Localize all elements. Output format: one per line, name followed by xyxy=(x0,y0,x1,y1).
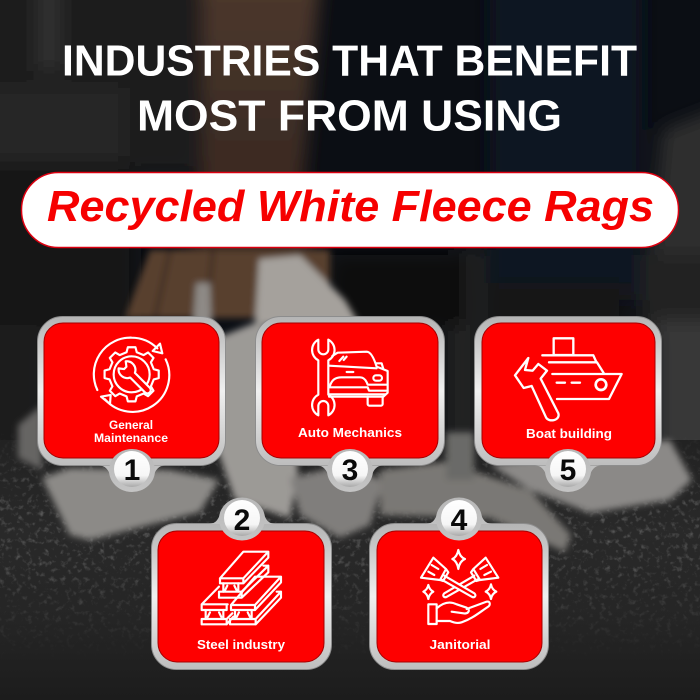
badge: number 3 xyxy=(327,449,373,492)
banner: product name pill: Recycled White Fleece Rags xyxy=(47,182,654,231)
badge: number 1: 1 xyxy=(124,454,140,487)
card 2: Steel industry xyxy=(152,498,332,670)
title xyxy=(62,36,637,140)
label: Maintenance xyxy=(94,433,168,445)
title: MOST FROM USING xyxy=(137,92,562,140)
badge: number 3: 3 xyxy=(342,454,358,487)
icon: stacked steel beams xyxy=(202,552,281,624)
card 4: Janitorial xyxy=(370,498,548,670)
label: General xyxy=(109,420,153,432)
icon: boat and wrench xyxy=(515,338,622,420)
badge: number 4: 4 xyxy=(451,504,468,537)
icon: gear and wrench with cycle arrows xyxy=(94,338,169,412)
badge: number 2 xyxy=(219,498,265,540)
label: Boat building xyxy=(526,427,612,441)
title: INDUSTRIES THAT BENEFIT xyxy=(62,36,637,86)
badge: number 5: 5 xyxy=(560,454,576,487)
card 5: Boat building xyxy=(474,316,662,492)
label: Janitorial xyxy=(430,638,490,652)
label: Auto Mechanics xyxy=(298,426,402,440)
card 3: Auto Mechanics xyxy=(256,316,444,492)
badge: number 1 xyxy=(109,449,155,492)
badge: number 2: 2 xyxy=(234,504,250,537)
banner: product name pill xyxy=(22,172,678,248)
badge: number 5 xyxy=(545,449,591,492)
badge: number 4 xyxy=(436,498,482,540)
icon: crossed brooms, sparkles and open hand xyxy=(421,550,498,624)
icon: wrench and car xyxy=(312,340,388,415)
label: Steel industry xyxy=(197,638,285,652)
card 1: General Maintenance xyxy=(38,316,226,492)
